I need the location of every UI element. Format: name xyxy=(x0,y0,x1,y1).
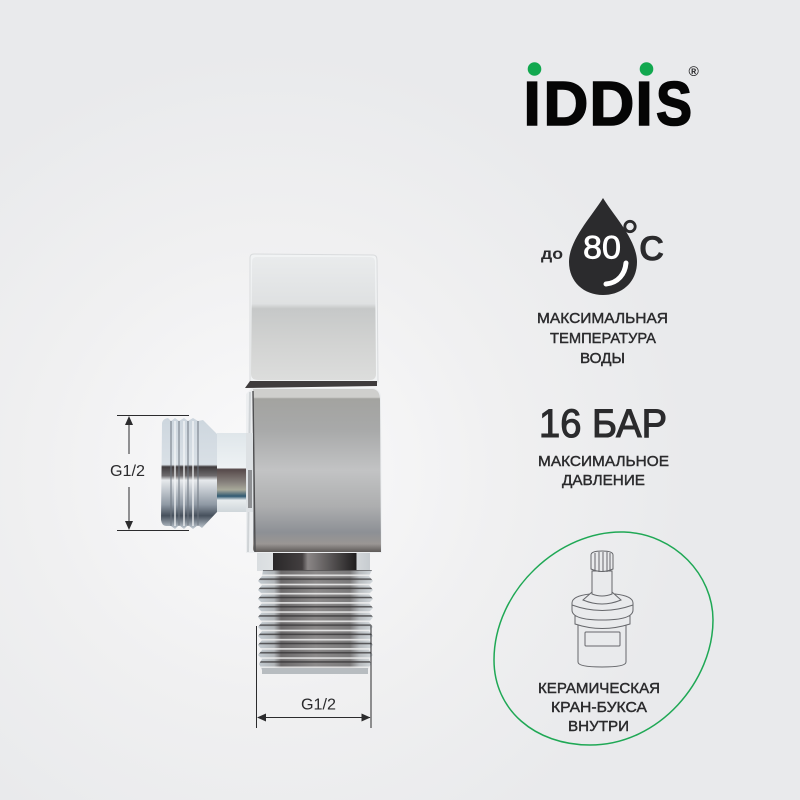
text: max water temperature: ВОДЫ xyxy=(580,350,625,367)
callout text: КЕРАМИЧЕСКАЯ xyxy=(538,680,660,697)
icon: water drop 80°C xyxy=(541,198,664,295)
icon: cartridge xyxy=(572,551,633,667)
text: max pressure xyxy=(538,453,669,489)
drop shape xyxy=(569,198,637,295)
text: max water temperature: ТЕМПЕРАТУРА xyxy=(550,330,656,347)
valve main body xyxy=(246,388,382,553)
letter C: C xyxy=(639,230,664,268)
callout text: ВНУТРИ xyxy=(568,718,629,735)
valve photo xyxy=(161,254,382,674)
callout text: КРАН-БУКСА xyxy=(551,699,647,716)
callout text xyxy=(538,680,660,735)
heading: 16 БАР: 16 БАР xyxy=(539,402,667,446)
dimension: left G1/2: G1/2 xyxy=(110,463,145,480)
dimension: bottom G1/2: G1/2 xyxy=(301,696,336,714)
side thread xyxy=(161,418,217,529)
valve side outlet xyxy=(161,418,253,529)
text: max water temperature xyxy=(537,310,668,367)
icon: logo green dots xyxy=(528,62,653,76)
logo: IDDIS: D xyxy=(590,70,634,139)
text: max pressure: ДАВЛЕНИЕ xyxy=(562,472,645,489)
text: max pressure: МАКСИМАЛЬНОЕ xyxy=(538,453,669,470)
callout: ceramic cartridge xyxy=(494,532,713,745)
drop number: 80 xyxy=(583,230,621,266)
drop highlight xyxy=(606,263,626,284)
logo: IDDIS: D xyxy=(544,70,588,139)
dimension: left G1/2 xyxy=(110,416,189,530)
valve handle cap xyxy=(245,254,378,388)
degree ring xyxy=(625,221,635,232)
green outline xyxy=(494,532,713,745)
logo: IDDIS: I xyxy=(636,70,653,139)
text: max water temperature: МАКСИМАЛЬНАЯ xyxy=(537,310,668,327)
logo: IDDIS: I xyxy=(524,70,541,139)
logo: IDDIS: S xyxy=(656,70,692,139)
valve collar xyxy=(257,553,370,571)
logo registered mark: ® xyxy=(688,63,700,79)
dimension: bottom G1/2 xyxy=(256,626,371,728)
logo: IDDIS xyxy=(524,62,700,139)
valve bottom thread xyxy=(258,570,373,674)
label: до: до xyxy=(541,246,563,263)
